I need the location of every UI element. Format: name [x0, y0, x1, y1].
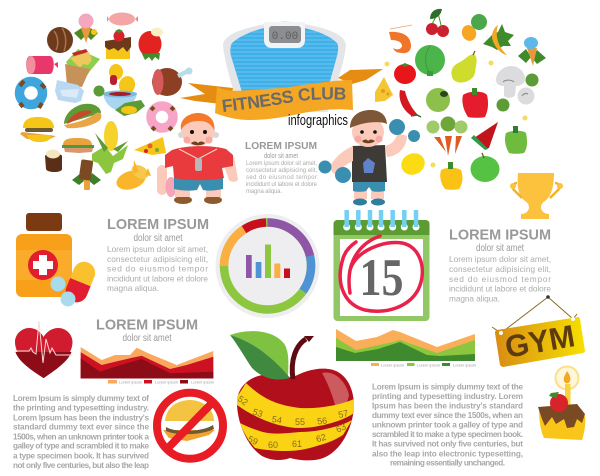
icon: no burger sign — [157, 393, 223, 459]
sign text: GYM — [502, 318, 577, 365]
chart: green area chart — [336, 329, 477, 368]
icon: wrap with fries — [55, 49, 100, 103]
icon: sandwich — [62, 138, 94, 153]
text block: bottom left: galley of type and scrambled it to make — [13, 442, 149, 451]
text block: medicine: consectetur adipisicing elit, — [107, 254, 208, 264]
icon: blue ice cream — [518, 37, 546, 66]
panel: healthy food cluster — [375, 9, 546, 190]
icon: taco — [64, 104, 101, 128]
text block: bottom left: Lorem Ipsum has been the industry's — [13, 413, 149, 422]
icon: chocolate ice lolly — [72, 159, 101, 190]
chart: green area chart: Lorem ipsum — [453, 362, 477, 368]
icon: pink donut — [151, 106, 174, 130]
text block: bottom right: It has survived not only five centuries, but — [372, 440, 523, 449]
text block: heart chart heading — [96, 316, 198, 344]
icon: birthday cake with candle — [538, 366, 585, 440]
subtitle: infographics: infographics — [288, 112, 348, 129]
icon: blue donut — [20, 81, 45, 108]
tape numbers: 55 — [295, 417, 305, 427]
text block: medicine: incididunt ut labore et dolore — [107, 274, 208, 284]
chart: green area chart: Lorem ipsum — [381, 362, 405, 368]
text block: medicine — [107, 216, 209, 293]
text block: bottom right: unknown printer took a galley of type and — [372, 421, 523, 430]
tape numbers — [236, 394, 349, 450]
text block: bottom left: 1500s, when an unknown printer took a — [13, 432, 149, 441]
tape numbers: 56 — [317, 415, 328, 426]
icon: medicine bottle and pills — [16, 213, 98, 306]
text block: top center: consectetur adipisicing elit, — [246, 168, 317, 174]
icon: olive — [426, 88, 450, 112]
text block: top center: magna aliqua. — [246, 189, 282, 195]
icon: strawberry cake — [105, 29, 131, 59]
text block: heart chart heading: LOREM IPSUM — [96, 316, 198, 334]
text block: bottom right: scrambled it to make a type specimen book. — [372, 430, 523, 439]
icon: cherries — [426, 9, 449, 37]
text block: top center: incididunt ut labore et dolore — [246, 182, 318, 188]
text block: calendar: Lorem ipsum dolor sit amet, — [449, 254, 551, 264]
tape numbers: 61 — [292, 439, 302, 449]
text block: medicine: dolor sit amet — [134, 232, 183, 244]
icon: gold trophy — [510, 173, 563, 219]
tape numbers: 53 — [251, 407, 264, 419]
icon: bathroom scale — [223, 21, 346, 112]
text block: calendar: dolor sit amet — [476, 242, 524, 254]
text block: medicine: Lorem ipsum dolor sit amet, — [107, 244, 208, 254]
chart: green area chart: Lorem ipsum — [417, 362, 441, 368]
icon: banana — [483, 24, 514, 55]
icon: shrimp — [389, 25, 412, 53]
chart: donut with bars — [216, 214, 320, 318]
character: muscular man with dumbbells — [318, 110, 420, 206]
text block: bottom left: a type specimen book. It has survived — [13, 451, 149, 460]
icon: red raspberry dessert — [138, 28, 163, 61]
icon: sausage — [107, 12, 138, 26]
icon: turnip with greens — [459, 14, 487, 43]
text block: medicine: sed do eiusmod tempor — [107, 264, 208, 274]
text block: calendar — [449, 226, 551, 304]
tape upper band — [237, 383, 354, 428]
icon: mushrooms — [496, 66, 534, 104]
text block: bottom left: not only five centuries, but also the leap — [13, 461, 149, 470]
character: overweight man — [157, 113, 238, 204]
text block: top center — [245, 140, 318, 195]
text block: bottom right: also the leap into electronic typesetting, — [372, 450, 523, 458]
panel: unhealthy food cluster — [20, 12, 192, 193]
ribbon title: FITNESS CLUB — [222, 87, 346, 112]
text block: heart chart heading: dolor sit amet — [122, 332, 172, 344]
icon: carrots — [426, 116, 468, 156]
text block: top center: dolor sit amet — [264, 151, 299, 160]
icon: broccoli — [496, 74, 538, 112]
icon: cabbage — [415, 45, 445, 76]
text block: top center: LOREM IPSUM — [245, 140, 317, 152]
text block: top center: Lorem ipsum dolor sit amet, — [246, 161, 317, 167]
text block: bottom right: printing and typesetting industry. Lorem — [372, 392, 523, 401]
icon: lemon — [398, 149, 428, 179]
tape numbers: 60 — [268, 440, 278, 450]
icon: salami — [26, 56, 58, 74]
icon: apple with measuring tape — [230, 331, 354, 460]
tape numbers: 62 — [315, 432, 327, 444]
text block: bottom right: Ipsum has been the industry's standard — [372, 402, 523, 410]
icon: watermelon slice — [471, 122, 498, 150]
icon: burger — [20, 117, 56, 142]
tape numbers: 52 — [236, 394, 250, 408]
tape numbers: 57 — [337, 408, 349, 420]
icon: green apple — [470, 153, 500, 182]
text block: bottom left: the printing and typesetting industry. — [13, 404, 149, 413]
icon: chocolate truffle — [47, 27, 73, 53]
tape lower band — [240, 420, 352, 451]
icon: pizza slice — [134, 137, 166, 155]
icon: ham leg — [152, 68, 192, 96]
icon: tomato — [394, 63, 416, 84]
date number: 15 — [360, 249, 404, 307]
scale display: 0.00 — [272, 31, 298, 43]
chart: red area chart: Lorem ipsum — [119, 380, 143, 384]
text block: calendar: sed do eiusmod tempor — [449, 274, 551, 284]
icon: red bell pepper — [462, 88, 488, 118]
text block: calendar: LOREM IPSUM — [449, 226, 551, 244]
text block: bottom right: dummy text ever since the 1500s, when an — [372, 411, 523, 420]
icon: heart with pulse — [15, 321, 72, 378]
text block: calendar: magna aliqua. — [449, 294, 500, 304]
text block: bottom right: remaining essentially unchanged. — [390, 459, 505, 468]
chart: red area chart — [81, 347, 215, 384]
chart: red area chart: Lorem ipsum — [191, 380, 215, 384]
text block: calendar: consectetur adipisicing elit, — [449, 264, 551, 274]
icon: corn — [92, 121, 128, 174]
text block: bottom left: Lorem Ipsum is simply dummy text of — [13, 394, 149, 403]
icon: roast chicken — [114, 160, 151, 193]
icon: green pepper — [505, 126, 527, 154]
text block: top center: sed do eiusmod tempor — [246, 175, 317, 181]
text block: medicine: magna aliqua. — [107, 283, 159, 293]
icon: fruit salad bowl — [94, 64, 145, 116]
text block: bottom left: standard dummy text ever since the — [13, 423, 149, 432]
icon: chili pepper — [400, 90, 421, 117]
banner: fitness club ribbon — [180, 69, 383, 120]
icon: yellow bell pepper — [440, 162, 462, 190]
tape numbers: 54 — [271, 414, 283, 426]
icon: cheese wedge — [375, 77, 393, 102]
text block: calendar: incididunt ut labore et dolore — [449, 284, 551, 294]
text block: bottom right — [372, 382, 523, 468]
chart: red area chart: Lorem ipsum — [155, 380, 179, 384]
icon: ice cream — [74, 14, 98, 43]
tape numbers: 63 — [334, 421, 348, 435]
decorative stars — [384, 60, 528, 168]
text block: medicine: LOREM IPSUM — [107, 216, 209, 233]
icon: calendar with circled date — [334, 210, 430, 321]
icon: pear — [451, 51, 477, 83]
text block: bottom right: Lorem Ipsum is simply dummy text of the — [372, 382, 523, 392]
tape numbers: 59 — [246, 434, 260, 447]
icon: chocolate cup — [45, 150, 62, 172]
text block: bottom left — [13, 394, 149, 470]
sign: gym — [492, 295, 585, 367]
